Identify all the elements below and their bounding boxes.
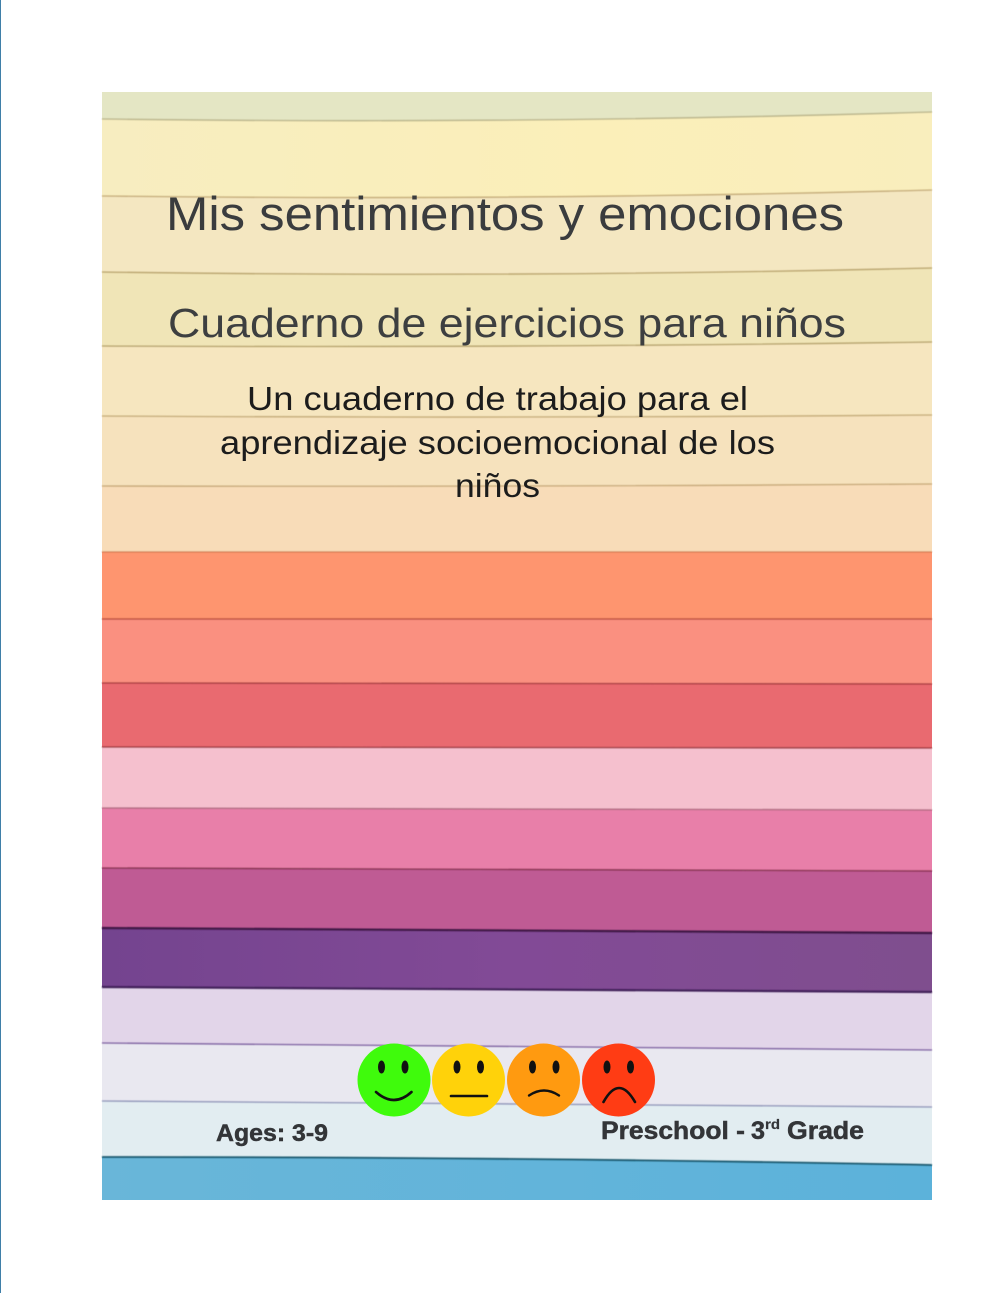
panel: coloured paper stripes bbox=[102, 92, 932, 1200]
icon: orange sad face bbox=[507, 1044, 580, 1116]
left edge blue line bbox=[0, 0, 1, 1293]
icon: green happy face bbox=[358, 1044, 430, 1116]
icon: yellow neutral face bbox=[432, 1044, 505, 1116]
description text block: Un cuaderno de trabajo para el bbox=[247, 380, 748, 417]
grade label: 3 bbox=[751, 1117, 765, 1145]
ages label: Ages: 3-9 bbox=[216, 1120, 328, 1147]
description text block: niños bbox=[455, 467, 540, 504]
subtitle: Cuaderno de ejercicios para niños bbox=[168, 300, 846, 346]
description text block bbox=[220, 380, 775, 504]
emotion faces row bbox=[358, 1044, 655, 1116]
grade label: Preschool - bbox=[601, 1117, 745, 1145]
grade label bbox=[601, 1116, 864, 1145]
title: Mis sentimientos y emociones bbox=[166, 187, 844, 240]
description text block: aprendizaje socioemocional de los bbox=[220, 424, 775, 461]
grade label: rd bbox=[765, 1116, 780, 1132]
icon: red very sad face bbox=[582, 1044, 655, 1116]
grade label: Grade bbox=[787, 1117, 864, 1145]
